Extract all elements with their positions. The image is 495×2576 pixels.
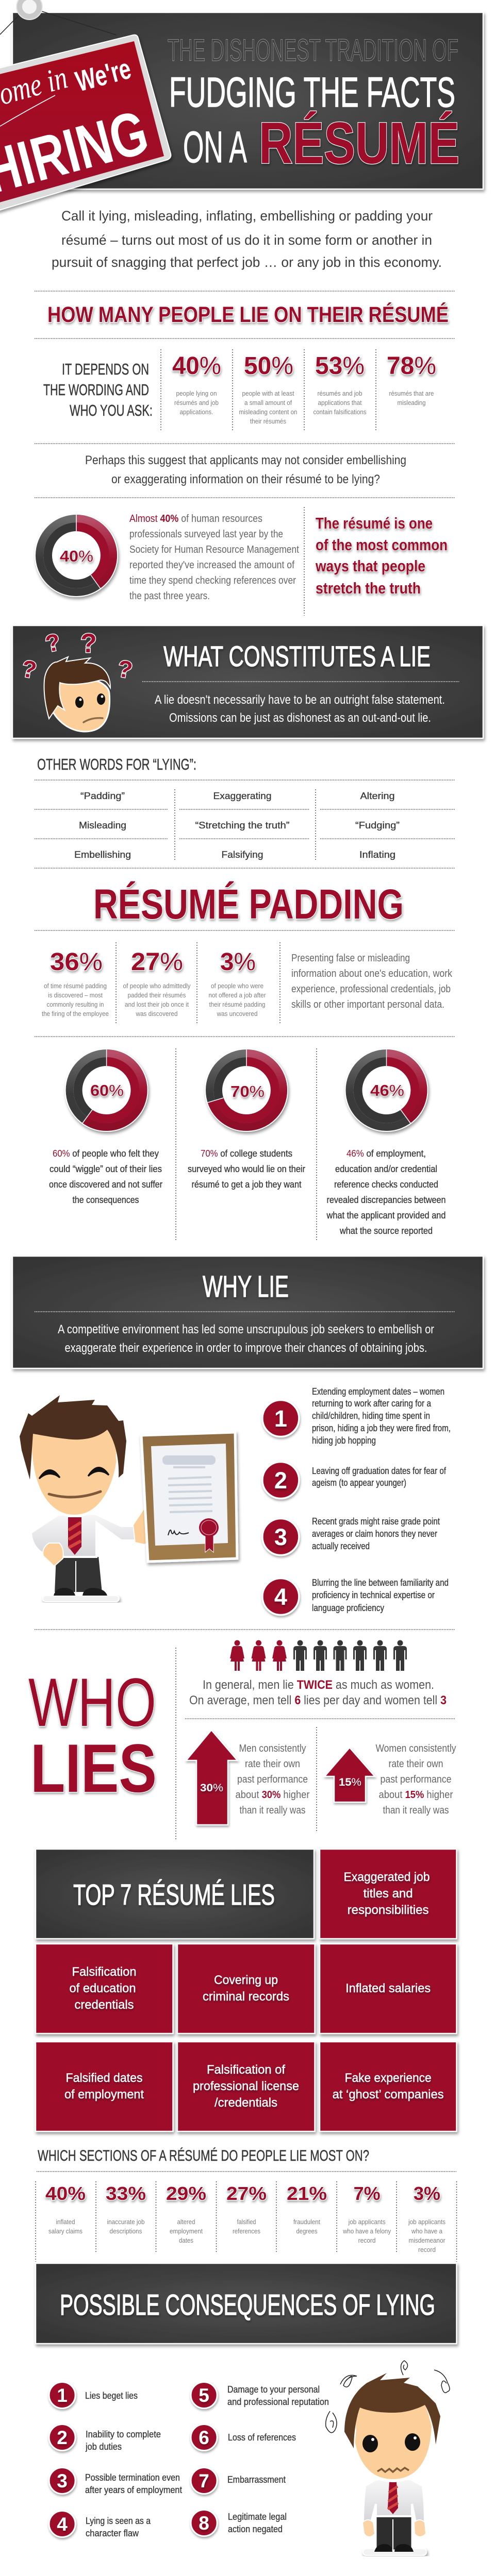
- stat 3%: [208, 948, 266, 1018]
- item 3: averages or claim honors they never: [312, 1529, 437, 1539]
- item 4: [49, 2511, 151, 2538]
- numbered list: why people lie: [262, 1386, 451, 1615]
- item 5: 5: [199, 2385, 209, 2406]
- title tile: [36, 1849, 314, 1939]
- title tile: TOP 7 RÉSUMÉ LIES: [73, 1878, 275, 1911]
- text block: 40% of HR professionals: Almost 40% of human resources: [129, 513, 262, 524]
- item 1: 1: [57, 2385, 68, 2406]
- hand with thumb: [133, 1507, 151, 1545]
- donut chart: 46%: [344, 1048, 428, 1132]
- word grid: Altering: [360, 791, 395, 801]
- caption: 60%: [49, 1148, 162, 1205]
- stat 40%: résumés and job: [174, 399, 219, 406]
- intro text: pursuit of snagging that perfect job … or any job in this economy.: [52, 255, 442, 270]
- stat 27%: [123, 948, 191, 1018]
- icon: stress scribbles: [326, 2361, 450, 2433]
- stat 21%: degrees: [296, 2227, 318, 2235]
- item 3: after years of employment: [85, 2485, 182, 2495]
- text block: 40% of HR professionals: [129, 513, 299, 602]
- stat 27%: 27%: [131, 948, 183, 976]
- item 7: Embarrassment: [227, 2475, 286, 2485]
- text: men overrate performance: Men consistently: [239, 1743, 306, 1754]
- stat 50%: their résumés: [250, 417, 286, 425]
- word grid: “Padding”: [80, 791, 125, 801]
- item 1: child/children, hiding time spent in: [312, 1411, 430, 1421]
- stat 40%: salary claims: [48, 2227, 82, 2235]
- stat 21%: [287, 2183, 327, 2235]
- tile: exaggerated job titles: Exaggerated job: [343, 1870, 430, 1884]
- tile: exaggerated job titles: [320, 1849, 457, 1939]
- icon: hanging sign strings and pin: [0, 0, 117, 35]
- text: men overrate performance: [235, 1743, 310, 1816]
- item 6: [191, 2425, 296, 2450]
- stat 27%: of people who admittedly: [123, 982, 191, 990]
- donut chart: 60%: [65, 1048, 148, 1132]
- stat 40%: applications.: [179, 408, 213, 416]
- intro text: Call it lying, misleading, inflating, embellishing or padding your: [61, 208, 433, 224]
- tile: inflated salaries: [320, 1944, 457, 2033]
- item 1: returning to work after caring for a: [312, 1398, 432, 1409]
- item 1: [262, 1386, 451, 1446]
- tile: falsified dates of employment: [36, 2042, 173, 2131]
- stat 36%: the firing of the employee: [42, 1010, 109, 1018]
- icon: question marks: ?: [116, 655, 135, 684]
- tile: falsification of education credentials: Falsification: [72, 1965, 136, 1979]
- caption: 60%: once discovered and not suffer: [49, 1179, 162, 1190]
- item 8: action negated: [228, 2524, 283, 2534]
- item 2: job duties: [85, 2442, 122, 2452]
- stat 3%: not offered a job after: [208, 991, 266, 999]
- word grid: “Fudging”: [355, 820, 400, 831]
- stat 3%: was uncovered: [217, 1010, 258, 1018]
- stat 3%: job applicants: [408, 2218, 446, 2226]
- item 4: [262, 1578, 449, 1615]
- panel: why lie: [12, 1256, 483, 1368]
- stat 36%: 36%: [50, 948, 103, 976]
- item 4: character flaw: [86, 2528, 139, 2538]
- question text: [85, 453, 406, 486]
- description: [155, 693, 445, 725]
- item 4: Lying is seen as a: [86, 2516, 151, 2526]
- text: women overrate performance: rate their own: [389, 1758, 443, 1770]
- item 5: [191, 2382, 329, 2408]
- item 4: 4: [57, 2514, 68, 2535]
- stat 27%: references: [233, 2227, 260, 2235]
- item 3: actually received: [312, 1541, 370, 1551]
- header panel: [0, 0, 483, 211]
- stat 33%: descriptions: [109, 2227, 142, 2235]
- caption: 46%: what the applicant provided and: [326, 1210, 446, 1221]
- side heading: IT DEPENDS ON: [62, 360, 149, 378]
- item 8: Legitimate legal: [228, 2512, 287, 2522]
- word grid: [74, 791, 400, 860]
- text block: men lie twice as much: On average, men tell 6 lies per day and women tell 3: [189, 1693, 447, 1707]
- side heading: [43, 360, 153, 419]
- stat 21%: fraudulent: [293, 2218, 320, 2226]
- stat 27%: [226, 2183, 267, 2235]
- caption: 60%: could “wiggle” out of their lies: [50, 1164, 162, 1174]
- heading: who lies: WHO: [28, 1665, 156, 1741]
- item 2: [262, 1462, 447, 1498]
- word grid: “Stretching the truth”: [195, 820, 290, 831]
- stats: it depends on the wording: [43, 349, 436, 432]
- panel: possible consequences of lying: [36, 2263, 457, 2344]
- item 3: 3: [57, 2470, 68, 2492]
- word grid: Embellishing: [74, 850, 131, 860]
- item 5: and professional reputation: [227, 2397, 329, 2407]
- description: [58, 1323, 434, 1355]
- item 3: Possible termination even: [85, 2472, 180, 2483]
- item 2: Inability to complete: [86, 2429, 161, 2439]
- item 4: proficiency in technical expertise or: [312, 1590, 435, 1600]
- item 7: 7: [199, 2470, 209, 2492]
- tile: covering up criminal records: Covering up: [214, 1973, 278, 1987]
- tile: falsification of education credentials: of education: [69, 1981, 136, 1995]
- main title: [168, 33, 459, 176]
- stat 27%: was discovered: [136, 1010, 177, 1018]
- text: men overrate performance: past performance: [237, 1774, 308, 1785]
- icon: confused man head: [44, 657, 110, 732]
- text block: 40% of HR professionals: the past three years.: [129, 590, 210, 602]
- caption: 60%: the consequences: [72, 1195, 139, 1205]
- shirt and arms: [31, 1514, 135, 1566]
- word grid: Falsifying: [222, 850, 263, 860]
- text block: 40% of HR professionals: time they spend checking references over: [129, 575, 296, 586]
- item 2: 2: [57, 2427, 68, 2448]
- tile: inflated salaries: Inflated salaries: [345, 1981, 431, 1995]
- stat 40%: inflated: [56, 2218, 75, 2226]
- stat 27%: falsified: [237, 2218, 256, 2226]
- item 1: Lies beget lies: [85, 2391, 138, 2401]
- text block: 40% of HR professionals: professionals surveyed last year by the: [129, 529, 283, 540]
- stat 53%: applications that: [318, 399, 362, 406]
- stat 33%: inaccurate job: [107, 2218, 144, 2226]
- stat 3%: [408, 2183, 446, 2253]
- stat 29%: employment: [170, 2227, 203, 2235]
- item 7: [191, 2468, 286, 2494]
- stat 3%: 3%: [220, 948, 256, 976]
- word grid: Misleading: [79, 820, 126, 831]
- hiring sign: [0, 35, 171, 211]
- stat 50%: misleading content on: [239, 408, 297, 416]
- icon: question marks: [20, 628, 135, 684]
- word grid: Exaggerating: [213, 791, 271, 801]
- stat 36%: commonly resulting in: [46, 1001, 104, 1008]
- stat 78%: [387, 352, 436, 406]
- stat 33%: 33%: [106, 2183, 146, 2204]
- certificate: [141, 1432, 237, 1562]
- heading: résumé padding: RÉSUMÉ PADDING: [93, 881, 404, 928]
- donut chart: 46%: 46%: [370, 1081, 404, 1099]
- text: women overrate performance: Women consistently: [375, 1743, 456, 1754]
- stat 78%: misleading: [397, 399, 426, 406]
- callout: résumé stretch the truth: The résumé is one: [316, 514, 433, 532]
- text block: men lie twice as much: In general, men lie TWICE as much as women.: [203, 1678, 434, 1692]
- callout: résumé stretch the truth: [315, 514, 448, 597]
- tile: covering up criminal records: criminal records: [203, 1990, 289, 2004]
- illustration: stressed man: [326, 2361, 450, 2555]
- stat 50%: people with at least: [242, 389, 294, 397]
- description: A competitive environment has led some unscrupulous job seekers to embellish or: [58, 1323, 434, 1336]
- item 2: ageism (to appear younger): [312, 1478, 406, 1488]
- stat 7%: 7%: [354, 2183, 381, 2204]
- item 1: prison, hiding a job they were fired from,: [312, 1423, 451, 1433]
- stat 78%: 78%: [387, 352, 436, 380]
- side heading: WHO YOU ASK:: [70, 401, 153, 419]
- tile: falsification of education credentials: [36, 1944, 173, 2033]
- text block: presenting false information: skills or other important personal data.: [291, 999, 444, 1010]
- stat 40%: [45, 2183, 86, 2235]
- heading: WHY LIE: [203, 1270, 289, 1303]
- item 2: Leaving off graduation dates for fear of: [312, 1466, 447, 1476]
- word grid: Inflating: [359, 850, 395, 860]
- stat 36%: [42, 948, 109, 1018]
- text block: presenting false information: experience, professional credentials, job: [291, 984, 451, 995]
- description: A lie doesn't necessarily have to be an outright false statement.: [155, 693, 445, 707]
- stat 7%: who have a felony: [342, 2227, 391, 2235]
- stat 36%: is discovered – most: [48, 991, 103, 999]
- stat 40%: people lying on: [176, 389, 217, 397]
- intro text: résumé – turns out most of us do it in some form or another in: [61, 232, 432, 248]
- callout: résumé stretch the truth: of the most common: [316, 536, 448, 554]
- tile: fake experience: Fake experience: [345, 2071, 432, 2085]
- item 6: 6: [199, 2427, 209, 2448]
- caption: 46%: reference checks conducted: [334, 1179, 438, 1190]
- tile: fake experience: [320, 2042, 457, 2131]
- caption: 46%: revealed discrepancies between: [327, 1195, 446, 1205]
- caption: 46%: what the source reported: [339, 1226, 433, 1236]
- icon: question marks: ?: [20, 655, 39, 684]
- item 3: Recent grads might raise grade point: [312, 1516, 440, 1527]
- caption: 46%: 46% of employment,: [346, 1148, 426, 1159]
- stat 50%: [239, 352, 297, 425]
- main title: ON A: [183, 123, 247, 172]
- text: women overrate performance: than it really was: [383, 1805, 449, 1816]
- head: [344, 2373, 440, 2481]
- stat 27%: and lost their job once it: [125, 1001, 189, 1008]
- text: men overrate performance: about 30% higher: [235, 1789, 310, 1801]
- question text: Perhaps this suggest that applicants may not consider embellishing: [85, 453, 406, 467]
- numbered list: consequences: [49, 2382, 329, 2538]
- stat 53%: résumés and job: [318, 389, 362, 397]
- text: men overrate performance: rate their own: [245, 1758, 300, 1770]
- text block: 40% of HR professionals: reported they've increased the amount of: [129, 560, 294, 571]
- item 1: 1: [274, 1405, 287, 1432]
- tile: falsification of professional license: Falsification of: [207, 2063, 285, 2077]
- heading: other words for lying: OTHER WORDS FOR “LYING”:: [37, 755, 196, 773]
- shirt, tie and hands: [362, 2479, 426, 2537]
- item 4: language proficiency: [312, 1603, 384, 1613]
- text block: presenting false information: [291, 953, 453, 1010]
- item 3: 3: [274, 1524, 287, 1550]
- stat 29%: altered: [177, 2218, 195, 2226]
- item 4: Blurring the line between familiarity and: [312, 1578, 449, 1588]
- tile: covering up criminal records: [177, 1944, 315, 2033]
- text block: presenting false information: Presenting false or misleading: [291, 953, 410, 964]
- stat 27%: 27%: [226, 2183, 267, 2204]
- stat 3%: misdemeanor: [408, 2236, 446, 2244]
- text: women overrate performance: about 15% higher: [378, 1789, 453, 1801]
- stat 3%: record: [418, 2246, 436, 2253]
- stat 53%: contain falsifications: [314, 408, 367, 416]
- stat 78%: résumés that are: [389, 389, 434, 397]
- caption: 46%: [326, 1148, 446, 1236]
- base: [363, 2549, 426, 2555]
- arrow: men 30%: 30%: [200, 1782, 223, 1794]
- callout: résumé stretch the truth: ways that people: [315, 557, 425, 575]
- heading: who lies: LIES: [30, 1731, 157, 1807]
- caption: 70%: surveyed who would lie on their: [188, 1164, 305, 1174]
- question text: or exaggerating information on their résumé to be lying?: [111, 472, 380, 486]
- stat 40%: 40%: [172, 352, 221, 380]
- dark title board: [12, 12, 483, 189]
- tile: falsification of professional license: /credentials: [214, 2096, 277, 2110]
- text: men overrate performance: than it really was: [239, 1805, 305, 1816]
- stat 36%: of time résumé padding: [44, 982, 107, 990]
- intro text: [52, 208, 442, 270]
- callout: résumé stretch the truth: stretch the truth: [316, 579, 421, 597]
- arrow: women 15%: [325, 1748, 375, 1802]
- stat 40%: 40%: [45, 2183, 86, 2204]
- heading: which sections: WHICH SECTIONS OF A RÉSUMÉ DO PEOPLE LIE MOST ON?: [38, 2147, 369, 2164]
- stat 40%: [172, 352, 221, 416]
- donut chart: 60%: 60%: [90, 1081, 124, 1099]
- caption: 70%: 70% of college students: [201, 1148, 292, 1159]
- stat 29%: 29%: [166, 2183, 206, 2204]
- stat 53%: 53%: [315, 352, 365, 380]
- donut chart: 70%: 70%: [230, 1082, 265, 1100]
- stat 3%: their résumé padding: [209, 1001, 265, 1008]
- arrow: men 30%: [186, 1730, 237, 1825]
- arrow: women 15%: 15%: [339, 1776, 361, 1788]
- hiring sign: We're: [72, 52, 134, 98]
- stat 7%: record: [358, 2236, 376, 2244]
- stat 27%: padded their résumés: [128, 991, 186, 999]
- item 6: Loss of references: [228, 2432, 296, 2443]
- item 8: [191, 2510, 287, 2536]
- stat 53%: [314, 352, 367, 416]
- tile: exaggerated job titles: responsibilities: [348, 1903, 429, 1917]
- item 4: 4: [274, 1584, 287, 1610]
- legs and shoes: [374, 2514, 414, 2552]
- stat 3%: who have a: [411, 2227, 443, 2235]
- stat 7%: [342, 2183, 391, 2244]
- panel grid: top 7 résumé lies: [36, 1849, 457, 2131]
- stat 50%: 50%: [244, 352, 293, 380]
- caption: 70%: [188, 1148, 305, 1190]
- text block: men lie twice as much: [189, 1678, 447, 1707]
- text block: 40% of HR professionals: Society for Human Resource Management: [129, 544, 299, 555]
- stat 7%: job applicants: [348, 2218, 386, 2226]
- head: [20, 1395, 126, 1516]
- stat 33%: [106, 2183, 146, 2235]
- tile: falsification of professional license: [177, 2042, 315, 2131]
- tile: falsification of education credentials: credentials: [74, 1998, 134, 2012]
- text: women overrate performance: past performance: [381, 1774, 452, 1785]
- stat 3%: 3%: [414, 2183, 440, 2204]
- text: women overrate performance: [375, 1743, 456, 1816]
- illustration: man holding certificate: [20, 1395, 237, 1602]
- stat 21%: 21%: [287, 2183, 327, 2204]
- base: [43, 1596, 119, 1602]
- heading: who lies: [28, 1665, 157, 1807]
- tile: exaggerated job titles: titles and: [364, 1887, 413, 1901]
- item 5: Damage to your personal: [227, 2384, 320, 2395]
- tile: falsified dates of employment: of employment: [64, 2088, 144, 2102]
- item 2: 2: [274, 1467, 287, 1494]
- caption: 46%: education and/or credential: [335, 1164, 437, 1174]
- donut chart: 70%: [205, 1048, 288, 1132]
- item 1: [49, 2382, 138, 2408]
- description: exaggerate their experience in order to improve their chances of obtaining jobs.: [65, 1341, 427, 1355]
- description: Omissions can be just as dishonest as an out-and-out lie.: [169, 711, 431, 725]
- stat 50%: a small amount of: [244, 399, 292, 406]
- icon: question marks: ?: [80, 629, 97, 658]
- donut chart: 40%: 40%: [60, 547, 93, 565]
- tile: falsification of professional license: professional license: [193, 2079, 299, 2093]
- tile: falsified dates of employment: Falsified dates: [66, 2071, 142, 2085]
- icon: question marks: ?: [43, 628, 63, 657]
- item 3: [49, 2468, 182, 2495]
- item 3: [262, 1516, 440, 1555]
- tile: fake experience: at ‘ghost’ companies: [333, 2088, 444, 2102]
- text block: presenting false information: information about one's education, work: [291, 968, 453, 979]
- item 8: 8: [199, 2513, 209, 2534]
- stat 29%: dates: [179, 2236, 193, 2244]
- panel: what constitutes a lie: [12, 625, 483, 738]
- side heading: THE WORDING AND: [43, 381, 149, 399]
- icon row: women and men: [230, 1640, 407, 1671]
- item 2: [49, 2425, 161, 2452]
- stat 29%: [166, 2183, 206, 2244]
- caption: 60%: 60% of people who felt they: [53, 1148, 159, 1159]
- stats row: sections lied on: [45, 2183, 446, 2253]
- stat 3%: of people who were: [211, 982, 263, 990]
- legs and shoes: [54, 1556, 107, 1596]
- donut chart: 40%: [35, 514, 118, 597]
- item 1: Extending employment dates – women: [312, 1386, 444, 1397]
- item 1: hiding job hopping: [312, 1435, 376, 1446]
- caption: 70%: résumé to get a job they want: [192, 1179, 301, 1190]
